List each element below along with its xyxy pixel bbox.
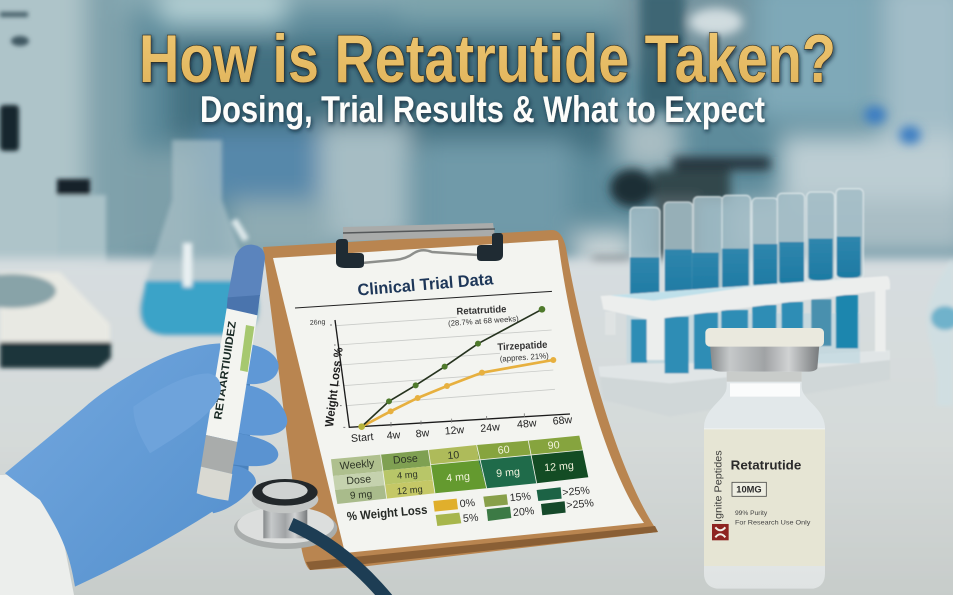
- vial label: Ignite Peptides: [714, 450, 725, 522]
- series: retatrutide: [358, 306, 545, 430]
- vial body: [704, 428, 825, 589]
- vial label: 99% Purity: [735, 510, 768, 517]
- axes: [335, 320, 570, 427]
- background flask: [138, 140, 260, 336]
- dose table: 12 mg: [544, 460, 574, 474]
- vial neck: [704, 370, 825, 453]
- left clamp: [336, 239, 364, 268]
- legend: >25%: [562, 485, 591, 499]
- clipboard: [263, 223, 658, 570]
- line chart: (28.7% at 68 weeks): [448, 314, 519, 328]
- cap: [705, 328, 824, 347]
- tube glass: [630, 207, 660, 301]
- glove: hand: [5, 343, 230, 587]
- pen: [197, 245, 265, 501]
- vial label: 10MG: [736, 485, 762, 495]
- legend: 5%: [463, 512, 479, 525]
- paper content: [295, 269, 595, 526]
- rack top rail: [601, 276, 890, 320]
- line chart: Weight Loss %: [322, 346, 346, 428]
- legend: [346, 485, 595, 526]
- vial label: For Research Use Only: [735, 519, 811, 526]
- line chart: [310, 304, 573, 445]
- background device: [0, 272, 111, 368]
- legend: % Weight Loss: [346, 503, 428, 524]
- dose table: Dose: [392, 453, 418, 467]
- test tube rack: [598, 189, 890, 417]
- line chart: 68w: [552, 414, 573, 428]
- dose table: 60: [497, 444, 510, 457]
- vial label: [704, 429, 825, 566]
- pen: RETAARTIUIIDEZ: [212, 320, 239, 420]
- tube liquid: [630, 237, 861, 301]
- gloved hand with pen: [0, 245, 287, 595]
- legend: 20%: [513, 505, 535, 519]
- line chart: 8w: [415, 427, 430, 440]
- vial: [704, 328, 825, 589]
- legend: >25%: [566, 497, 595, 512]
- rack base: [598, 350, 890, 417]
- background flask right: [927, 258, 953, 406]
- subheading: Dosing, Trial Results & What to Expect: [200, 89, 765, 130]
- dose table: 12 mg: [396, 484, 423, 496]
- legend: 15%: [509, 490, 532, 504]
- series labels: Retatrutide: [456, 304, 507, 318]
- dose table: [331, 436, 588, 504]
- paper sheet: [273, 240, 644, 553]
- line chart: Tirzepatide: [497, 340, 548, 353]
- chart heading: Clinical Trial Data: [357, 269, 495, 300]
- stethoscope tube: [291, 524, 388, 595]
- legend: 0%: [459, 497, 476, 510]
- dose table: 90: [547, 439, 560, 452]
- line chart: 12w: [444, 424, 465, 438]
- clip: [336, 223, 503, 268]
- axis labels: 26ng: [310, 319, 326, 327]
- clipboard board: [263, 230, 658, 570]
- right clamp: [477, 233, 503, 261]
- series: tirzepatide: [362, 357, 556, 427]
- glove: thumb: [133, 373, 221, 453]
- glove: fingers behind pen: [200, 344, 287, 513]
- line chart: 4w: [386, 429, 401, 442]
- line chart: 48w: [517, 417, 537, 431]
- vial label: Retatrutide: [731, 457, 801, 472]
- stethoscope: [234, 479, 337, 549]
- dose table: 9 mg: [496, 466, 520, 480]
- dose table: Dose: [346, 473, 372, 487]
- title: [139, 21, 836, 130]
- dose table: 4 mg: [397, 469, 418, 481]
- lower tube section: [627, 295, 860, 373]
- dose table: 4 mg: [446, 471, 470, 485]
- metal crimp: [710, 345, 819, 372]
- line chart: (appres. 21%): [499, 351, 549, 364]
- dose table: Weekly: [339, 457, 376, 472]
- line chart: 24w: [480, 421, 501, 435]
- lab coat sleeve: [0, 475, 74, 595]
- line chart: Start: [351, 431, 374, 445]
- brand logo: [712, 524, 729, 540]
- dose table: 10: [447, 449, 460, 462]
- dose table: 9 mg: [350, 489, 373, 502]
